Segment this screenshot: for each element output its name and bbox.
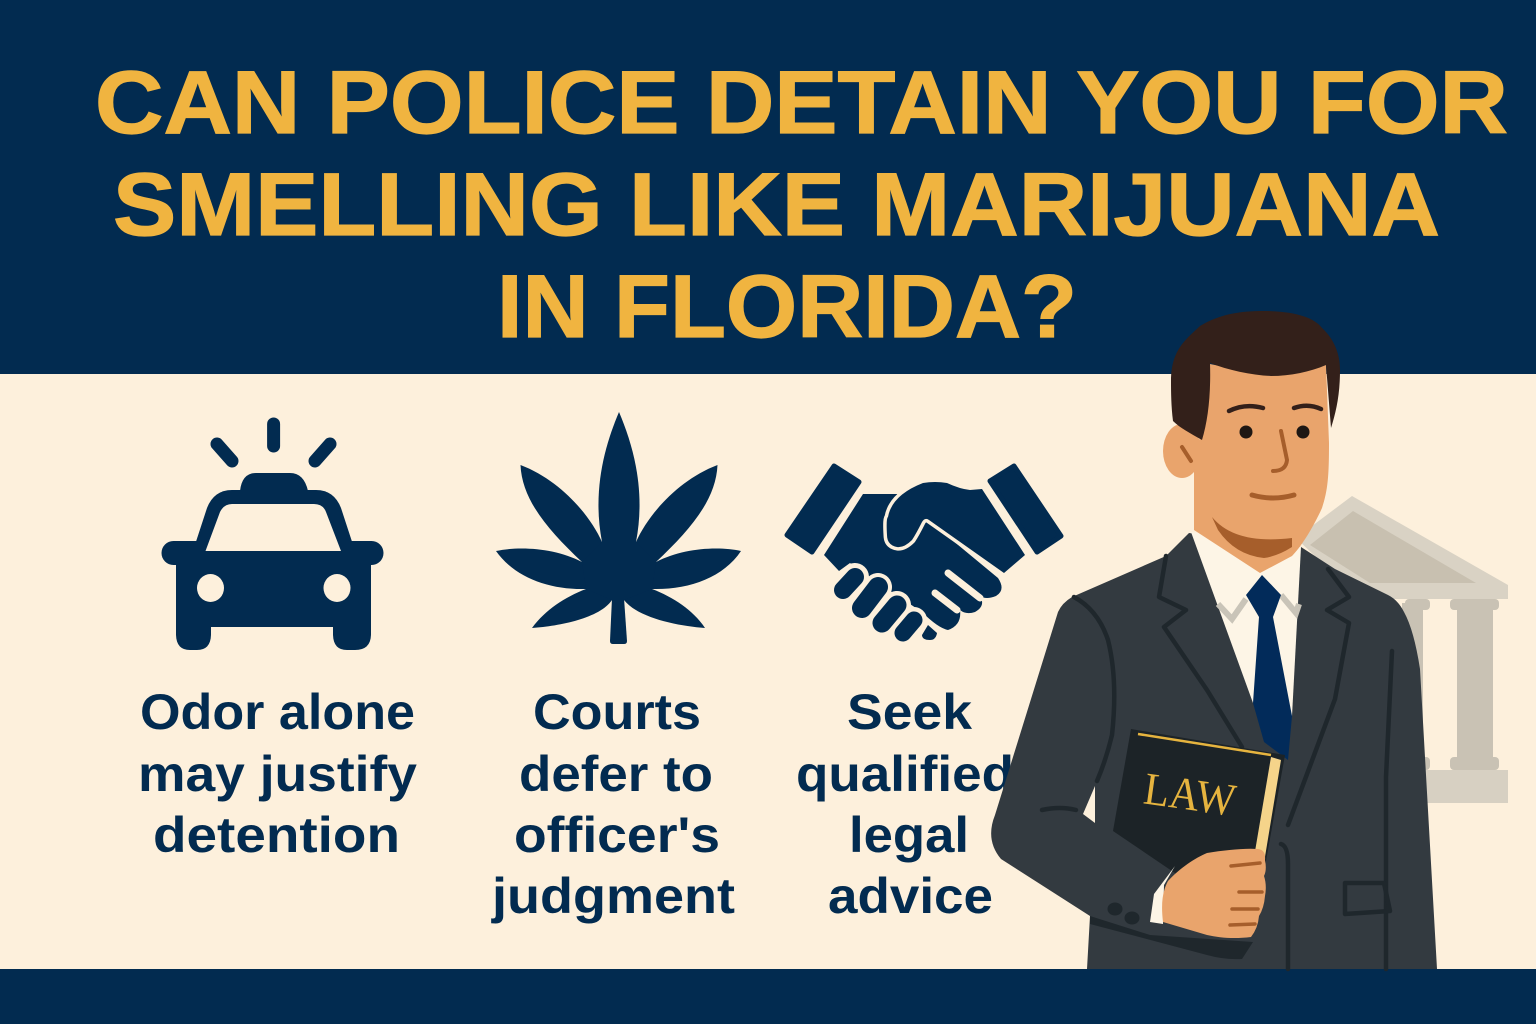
icon: law book: [1113, 729, 1285, 890]
label: seek advice: Seek: [847, 684, 972, 740]
header band: [0, 0, 1536, 374]
shirt: [1191, 532, 1301, 716]
courthouse: [1296, 496, 1508, 803]
facial features: [1229, 406, 1321, 411]
label: seek advice: qualified: [796, 746, 1014, 802]
label: courts defer: Courts: [533, 684, 701, 740]
neck shadow: [1212, 517, 1292, 558]
label: seek advice: legal: [849, 807, 969, 863]
icon: police car: [162, 424, 384, 650]
tie: [1246, 575, 1292, 760]
arm gap: [1083, 786, 1095, 823]
title: SMELLING LIKE MARIJUANA: [113, 154, 1440, 254]
label: courts defer: [491, 684, 735, 924]
sleeve shadow: [1090, 916, 1253, 959]
label: courts defer: officer's: [514, 807, 720, 863]
collar: [1218, 595, 1299, 619]
label: seek advice: advice: [828, 868, 993, 924]
footer band: [0, 969, 1536, 1024]
jacket seams: [1042, 556, 1392, 969]
finger lines: [1230, 863, 1262, 925]
label: odor alone: [138, 684, 417, 863]
title: IN FLORIDA?: [497, 256, 1077, 356]
label: odor alone: Odor alone: [140, 684, 415, 740]
hair: [1171, 311, 1340, 440]
icon: law book: LAW: [1141, 763, 1240, 826]
sleeve buttons: [1108, 902, 1140, 924]
label: odor alone: detention: [153, 807, 400, 863]
label: seek advice: [796, 684, 1014, 924]
title: CAN POLICE DETAIN YOU FOR: [95, 52, 1508, 152]
label: courts defer: judgment: [491, 868, 735, 924]
shirt cuff: [1150, 866, 1175, 924]
neck and face: [1194, 363, 1329, 573]
hand: [1162, 849, 1266, 938]
ear: [1163, 424, 1201, 478]
icon: handshake: [787, 466, 1061, 640]
label: odor alone: may justify: [138, 746, 417, 802]
jacket: [991, 533, 1437, 969]
icon: cannabis leaf: [496, 412, 741, 644]
lawyer figure: [991, 311, 1437, 969]
title: [95, 52, 1508, 356]
label: courts defer: defer to: [519, 746, 713, 802]
